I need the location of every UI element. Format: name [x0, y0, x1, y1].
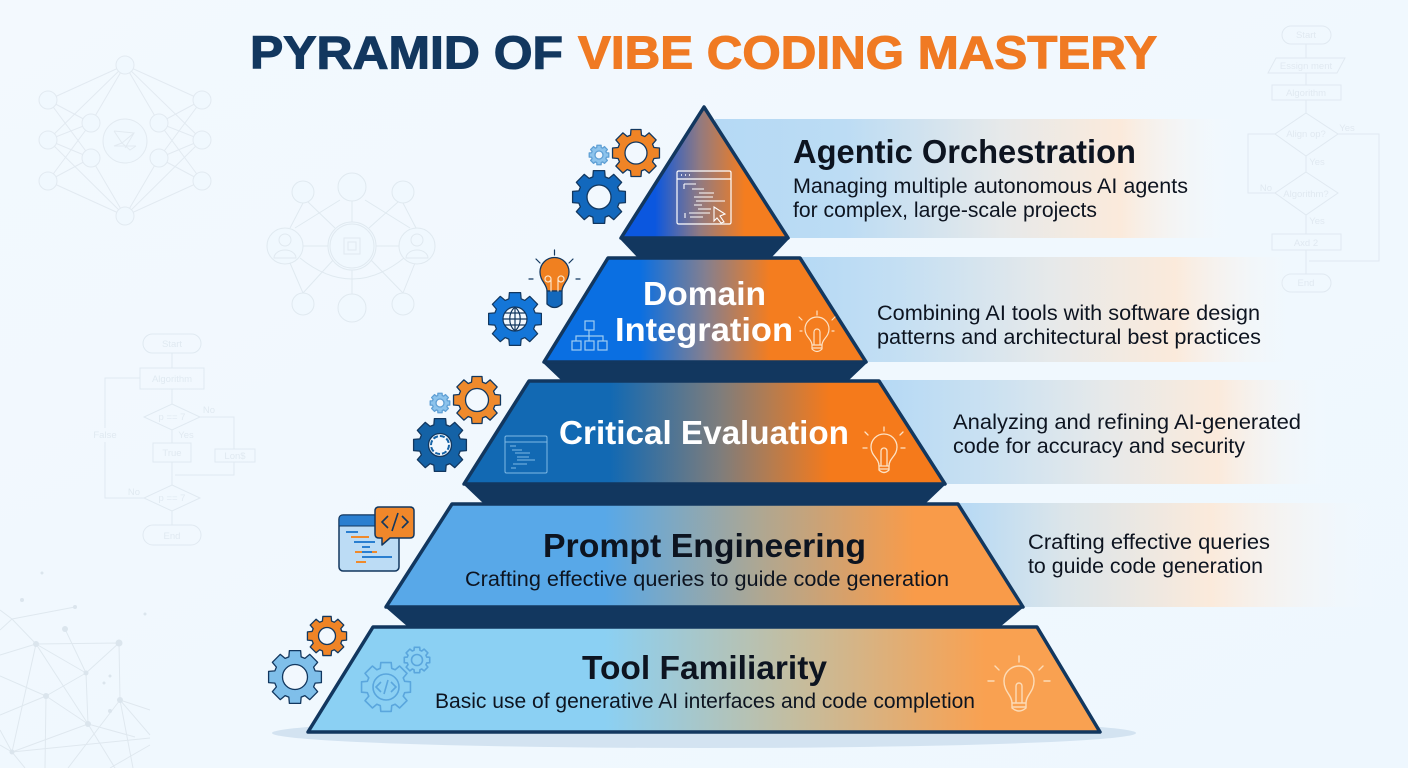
- background: flowchart right: Start: [1296, 30, 1316, 41]
- icon: code window with cursor: [677, 171, 731, 224]
- title: PYRAMID OF: [250, 26, 563, 78]
- icon: gear with globe: [489, 293, 541, 345]
- heading: prompt engineering: Prompt Engineering: [543, 527, 866, 564]
- background: flowchart right: [1248, 26, 1379, 292]
- icon: gears tier 5: [269, 616, 347, 703]
- icon: code window with speech bubble: [339, 507, 414, 571]
- background: flowchart left: End: [164, 531, 180, 542]
- background: flowchart left: Lon$: [224, 451, 246, 462]
- text: prompt engineering description: Crafting effective queries to guide code generation: [465, 568, 949, 591]
- background: flowchart left: p == 7: [159, 493, 185, 504]
- background: flowchart right: Algorithm: [1286, 88, 1326, 99]
- panel: critical evaluation description: Analyzing and refining AI-generated: [953, 411, 1301, 434]
- panel: domain integration description: patterns and architectural best practices: [877, 326, 1261, 349]
- icon: light bulb: [799, 311, 835, 352]
- title: [250, 26, 1157, 78]
- text: agentic orchestration description: for complex, large-scale projects: [793, 199, 1097, 222]
- background: agent network: [267, 173, 435, 322]
- background: flowchart left: False: [93, 430, 117, 441]
- background: flowchart left: [93, 334, 255, 545]
- background: flowchart right: Essign ment: [1280, 61, 1332, 72]
- heading: domain integration: Domain: [643, 275, 766, 312]
- background: flowchart left: True: [162, 448, 182, 459]
- background: flowchart left: No: [128, 487, 140, 498]
- background: neural network: [39, 56, 211, 225]
- background: flowchart left: No: [203, 405, 215, 416]
- background: flowchart right: No: [1260, 183, 1272, 194]
- background: flowchart right: Yes: [1309, 157, 1325, 168]
- heading: agentic orchestration: Agentic Orchestration: [793, 133, 1136, 170]
- tier 1: agentic orchestration: [619, 107, 790, 257]
- icon: orange light bulb: [529, 250, 580, 308]
- background: flowchart right: End: [1298, 278, 1314, 289]
- background: flowchart right: Align op?: [1286, 129, 1326, 140]
- text: agentic orchestration description: [793, 175, 1188, 222]
- tier 4: prompt engineering: [385, 504, 1024, 627]
- tier 2: domain integration: [542, 258, 868, 381]
- background: flowchart left: Yes: [178, 430, 194, 441]
- icon: gears tier 3: [414, 377, 500, 471]
- background: flowchart left: Start: [162, 339, 182, 350]
- background: flowchart left: p == 7: [159, 412, 185, 423]
- background: corner network: [0, 572, 150, 768]
- background: flowchart right: Axd 2: [1294, 238, 1318, 249]
- icon: light bulb: [863, 427, 905, 472]
- panel: critical evaluation description: code for accuracy and security: [953, 435, 1246, 458]
- text: agentic orchestration description: Managing multiple autonomous AI agents: [793, 175, 1188, 198]
- background: flowchart right: Yes: [1339, 123, 1355, 134]
- panel: agentic orchestration description: [715, 119, 1235, 238]
- panel: critical evaluation description: [880, 380, 1330, 484]
- icon: light bulb: [988, 656, 1050, 711]
- icon: code gears: [362, 647, 430, 711]
- panel: prompt engineering description: to guide code generation: [1028, 555, 1263, 578]
- background: flowchart right: Yes: [1309, 216, 1325, 227]
- panel: prompt engineering description: [958, 503, 1380, 607]
- heading: domain integration: [615, 275, 793, 348]
- tier 3: critical evaluation: [463, 381, 946, 504]
- title: VIBE CODING MASTERY: [578, 26, 1157, 78]
- heading: tool familiarity: Tool Familiarity: [582, 649, 828, 686]
- heading: critical evaluation: Critical Evaluation: [559, 414, 849, 451]
- panel: prompt engineering description: Crafting effective queries: [1028, 531, 1270, 554]
- background: flowchart left: Algorithm: [152, 374, 192, 385]
- background: flowchart right: Algorithm?: [1283, 189, 1329, 200]
- heading: domain integration: Integration: [615, 311, 793, 348]
- panel: domain integration description: [800, 257, 1300, 362]
- icon: code window: [505, 436, 547, 473]
- icon: org chart: [572, 321, 607, 350]
- icon: gears tier 1: [573, 130, 659, 223]
- panel: domain integration description: Combining AI tools with software design: [877, 302, 1260, 325]
- tier 5: tool familiarity: [308, 627, 1100, 732]
- ground shadow: [272, 718, 1136, 748]
- text: tool familiarity description: Basic use of generative AI interfaces and code completion: [435, 690, 975, 713]
